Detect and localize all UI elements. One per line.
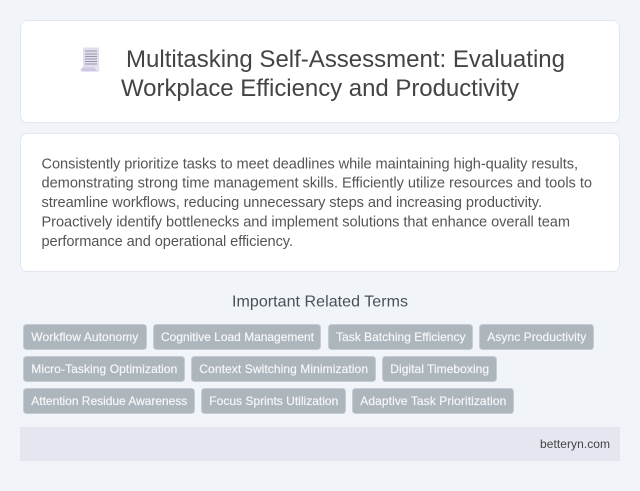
tag group: related terms (24, 324, 594, 414)
description text: streamline workflows, reducing unnecessary steps and increasing productivity. (42, 195, 542, 211)
tag: async productivity: Async Productivity (487, 330, 586, 344)
tag: attention residue awareness (24, 388, 194, 414)
tag: context switching minimization: Context Switching Minimization (199, 362, 368, 376)
tag: cognitive load management (154, 324, 320, 350)
tag: focus sprints utilization (202, 388, 346, 414)
footer source text: betteryn.com (540, 437, 610, 451)
icon: paper scroll document (80, 48, 100, 72)
footer bar (20, 427, 620, 461)
tag: focus sprints utilization: Focus Sprints Utilization (209, 394, 338, 408)
title: Workplace Efficiency and Productivity (121, 75, 519, 102)
tag: micro-tasking optimization: Micro-Tasking Optimization (31, 362, 177, 376)
tag: task batching efficiency: Task Batching Efficiency (336, 330, 466, 344)
heading: important related terms: Important Related Terms (232, 294, 408, 311)
description text: Consistently prioritize tasks to meet deadlines while maintaining high-quality results, (42, 156, 578, 172)
description text: performance and operational efficiency. (42, 234, 293, 250)
tag: digital timeboxing (382, 356, 496, 382)
tag: workflow autonomy (24, 324, 146, 350)
tag: adaptive task prioritization (352, 388, 514, 414)
tag: micro-tasking optimization (24, 356, 184, 382)
title (121, 46, 565, 102)
tag: workflow autonomy: Workflow Autonomy (31, 330, 138, 344)
panel: title card (20, 20, 620, 122)
tag: adaptive task prioritization: Adaptive Task Prioritization (360, 394, 506, 408)
tag: attention residue awareness: Attention Residue Awareness (31, 394, 187, 408)
description text (42, 156, 592, 250)
description text: Proactively identify bottlenecks and implement solutions that enhance overall team (42, 215, 570, 231)
tag: async productivity (480, 324, 594, 350)
description text: demonstrating strong time management skills. Efficiently utilize resources and tools to (42, 176, 592, 192)
tag: context switching minimization (192, 356, 376, 382)
title: Multitasking Self-Assessment: Evaluating (126, 46, 565, 73)
tag: cognitive load management: Cognitive Load Management (161, 330, 315, 344)
panel: description card (20, 134, 620, 272)
tag: digital timeboxing: Digital Timeboxing (390, 362, 489, 376)
tag: task batching efficiency (328, 324, 472, 350)
